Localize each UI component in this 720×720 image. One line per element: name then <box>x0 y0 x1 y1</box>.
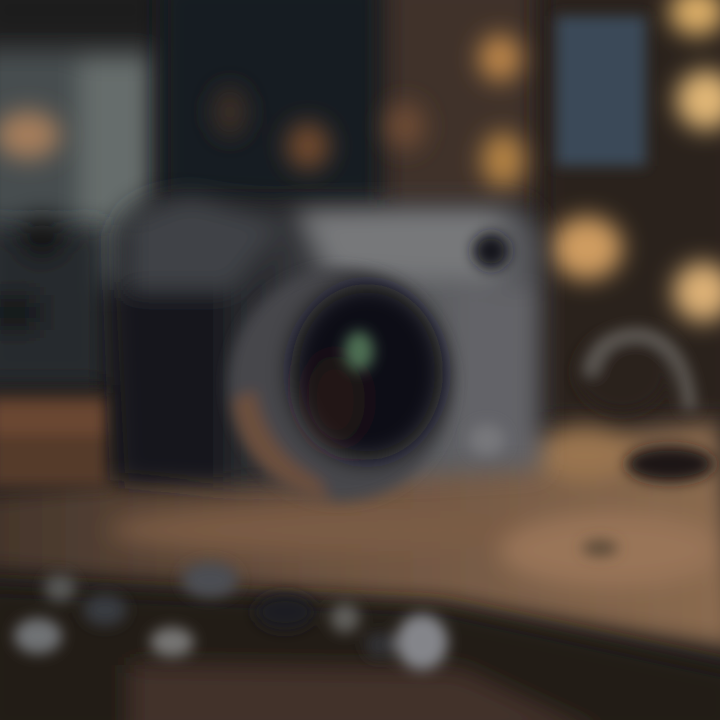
lens outer ring <box>228 269 452 501</box>
grey arc object right <box>576 332 690 412</box>
panel: dark navy wall <box>160 0 385 200</box>
panel: brown wood wall <box>385 0 540 205</box>
dark object on table right <box>626 446 714 482</box>
camera <box>112 195 542 501</box>
brown box <box>0 395 108 487</box>
panel: blue grey window right <box>556 16 646 166</box>
table front dark edge <box>0 585 720 720</box>
objects left of camera <box>0 216 108 487</box>
scattered silver gems <box>14 540 618 670</box>
lens bottom highlight <box>469 424 505 456</box>
wooden table <box>0 420 720 650</box>
camera body <box>112 195 542 485</box>
lens green reflection <box>344 331 374 371</box>
panel: grey window left <box>0 0 160 290</box>
lens inner glass <box>291 284 443 460</box>
viewfinder knob <box>473 233 509 269</box>
warm bokeh lights <box>0 0 720 322</box>
panel: right dark wall <box>540 0 720 420</box>
